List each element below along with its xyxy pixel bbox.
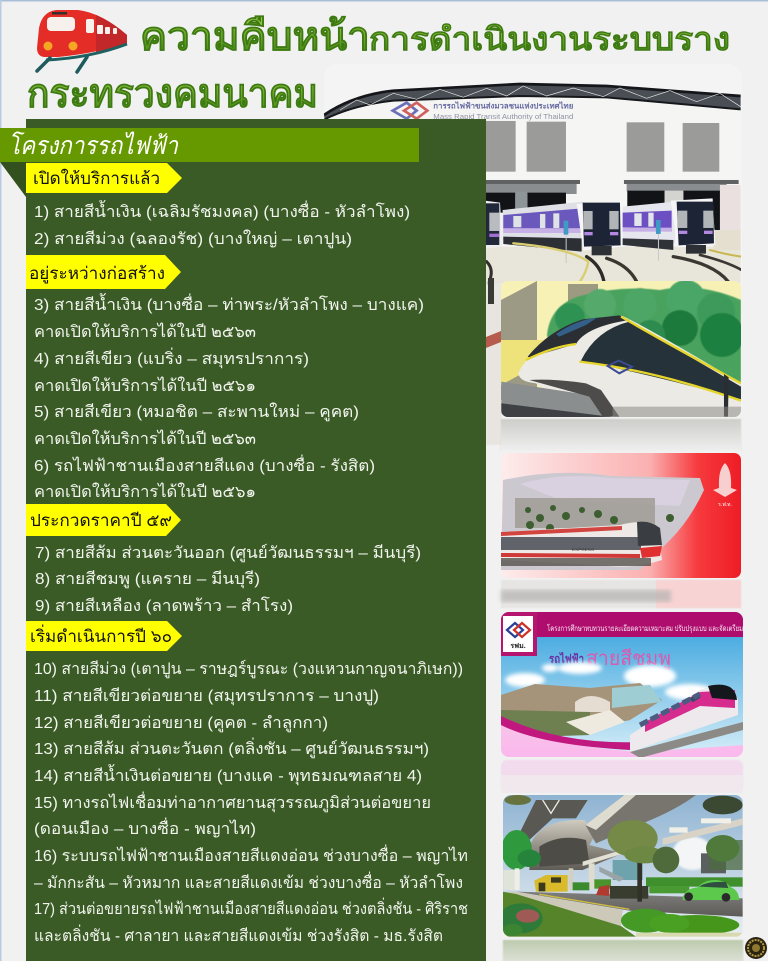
- train 2 body: [503, 202, 585, 247]
- list: under construction lines: 3) สายสีน้ำเงิน (บางซื่อ – ท่าพระ/หัวลำโพง – บางแค): [34, 293, 424, 314]
- train body: [518, 316, 741, 420]
- gravel: [636, 933, 743, 937]
- list: starting 2560 lines: 14) สายสีน้ำเงินต่อขยาย (บางแค - พุทธมณฑลสาย 4): [34, 764, 422, 786]
- list: bidding lines: [35, 543, 421, 615]
- dark and red cars: [610, 886, 648, 899]
- platform signs: [656, 220, 661, 234]
- MRTA sign text: [433, 101, 573, 121]
- list: starting 2560 lines: [34, 659, 468, 945]
- station photo: [501, 473, 704, 570]
- list: starting 2560 lines: 11) สายสีเขียวต่อขยาย (สมุทรปราการ – บางปู): [34, 687, 379, 706]
- MRTA sign text: การรถไฟฟ้าขนส่งมวลชนแห่งประเทศไทย: [433, 101, 573, 111]
- reflection: pink panel: [501, 760, 743, 793]
- skywalk: [663, 818, 743, 845]
- list: opened lines: 2) สายสีม่วง (ฉลองรัช) (บางใหญ่ – เตาปูน): [34, 229, 352, 249]
- depot wall: [325, 93, 741, 283]
- list: under construction lines: 4) สายสีเขียว (แบริ่ง – สมุทรปราการ): [34, 347, 309, 369]
- MRTA sign text: Mass Rapid Transit Authority of Thailand: [433, 114, 573, 121]
- MRTA logo box: [501, 612, 537, 656]
- list: under construction lines: 6) รถไฟฟ้าชานเมืองสายสีแดง (บางซื่อ - รังสิต): [34, 454, 375, 475]
- pink line wordmark: รถไฟฟ้า: [549, 651, 584, 666]
- train 3 body: [623, 202, 675, 243]
- track beam: [501, 382, 613, 420]
- louvres: [480, 121, 719, 172]
- pink line wordmark: [549, 648, 671, 671]
- image: red line SRT: [501, 453, 741, 578]
- title: line 1: ความคืบหน้า: [140, 15, 370, 59]
- top-right tree: [703, 796, 743, 814]
- list: under construction lines: คาดเปิดให้บริการได้ในปี ๒๕๖๑: [34, 376, 256, 395]
- mall building: [501, 683, 662, 722]
- reflection: road panel: [503, 940, 743, 961]
- awnings and recess band: [480, 184, 577, 194]
- distant building: [701, 853, 726, 873]
- list: starting 2560 lines: 17) ส่วนต่อขยายรถไฟฟ้าชานเมืองสายสีแดงอ่อน ช่วงตลิ่งชัน - ศิริราช: [34, 897, 468, 918]
- tag: opened: เปิดให้บริการแล้ว: [33, 168, 160, 188]
- image: station and road rendering: [499, 795, 743, 937]
- list: opened lines: [34, 200, 410, 249]
- list: starting 2560 lines: 15) ทางรถไฟเชื่อมท่าอากาศยานสุวรรณภูมิส่วนต่อขยาย: [34, 791, 431, 813]
- MRTA logo: [393, 103, 427, 119]
- SRT emblem: [713, 463, 737, 508]
- reflection: yellow train: [501, 419, 741, 453]
- list: starting 2560 lines: และตลิ่งชัน - ศาลายา และสายสีแดงเข้ม ช่วงรังสิต - มธ.รังสิต: [34, 924, 443, 945]
- list: under construction lines: 5) สายสีเขียว (หมอชิต – สะพานใหม่ – คูคต): [34, 402, 359, 422]
- tag: starting 2560: [26, 621, 182, 651]
- SRT emblem: ร.ฟ.ท.: [718, 502, 732, 508]
- train 1: [486, 200, 501, 248]
- icon: red train on rails: [37, 10, 127, 72]
- list: starting 2560 lines: 12) สายสีเขียวต่อขยาย (คูคต - ลำลูกกา): [34, 714, 328, 733]
- train 2 front: [577, 202, 623, 251]
- dark openings: [480, 191, 720, 231]
- pillars: [583, 850, 622, 866]
- list: starting 2560 lines: 10) สายสีม่วง (เตาปูน – ราษฎร์บูรณะ (วงแหวนกาญจนาภิเษก)): [34, 659, 463, 679]
- hedges behind road: [646, 877, 743, 887]
- depot roof truss: [324, 84, 741, 120]
- green car: [683, 880, 739, 902]
- grass: [503, 892, 636, 937]
- road: [516, 892, 743, 917]
- title: line 2: กระทรวงคมนาคม: [27, 72, 318, 116]
- EXPRESS lettering: EXPRESS: [572, 547, 594, 552]
- title: line 1: [140, 15, 730, 59]
- list: under construction lines: คาดเปิดให้บริการได้ในปี ๒๕๖๓: [34, 322, 256, 341]
- tag: bidding: ประกวดราคาปี ๕๙: [30, 511, 172, 530]
- list: bidding lines: 8) สายสีชมพู (แคราย – มีนบุรี): [35, 570, 260, 589]
- image: purple line train depot: [324, 84, 742, 283]
- list: bidding lines: 7) สายสีส้ม ส่วนตะวันออก (ศูนย์วัฒนธรรมฯ – มีนบุรี): [35, 543, 421, 563]
- clouds: [673, 837, 713, 870]
- pink monorail: [630, 687, 738, 752]
- fold of heading ribbon: [0, 162, 26, 197]
- list: opened lines: 1) สายสีน้ำเงิน (เฉลิมรัชมงคล) (บางซื่อ - หัวลำโพง): [34, 200, 410, 221]
- reflection: red panel: [501, 580, 741, 608]
- panel: backdrop card behind depot photo: [324, 64, 742, 294]
- MRTA logo box: รฟม.: [510, 642, 526, 650]
- yellow lower-left wash: [501, 340, 545, 385]
- list: starting 2560 lines: 13) สายสีส้ม ส่วนตะวันตก (ตลิ่งชัน – ศูนย์วัฒนธรรมฯ): [34, 737, 429, 759]
- image: yellow line monorail: [501, 280, 744, 420]
- tracks: [487, 243, 742, 283]
- ground: [480, 247, 741, 283]
- pink line wordmark: สายสีชมพู: [586, 648, 671, 671]
- pink swoosh: [501, 722, 743, 757]
- image: pink line project: [501, 612, 743, 758]
- center tree: [608, 820, 679, 902]
- heading ribbon: [0, 128, 419, 162]
- heading ribbon: โครงการรถไฟฟ้า: [8, 131, 179, 160]
- tag: starting 2560: เริ่มดำเนินการปี ๖๐: [30, 624, 172, 646]
- list: under construction lines: คาดเปิดให้บริการได้ในปี ๒๕๖๓: [34, 429, 256, 448]
- tag: under construction: [26, 255, 181, 289]
- photo spill left of yellow train: fading track: [486, 278, 502, 445]
- station roof: [519, 800, 588, 840]
- title: line 1: การดำเนินงานระบบราง: [369, 21, 730, 57]
- list: starting 2560 lines: (ดอนเมือง – บางซื่อ - พญาไท): [34, 817, 256, 838]
- list: bidding lines: 9) สายสีเหลือง (ลาดพร้าว – สำโรง): [35, 596, 293, 615]
- trees: [546, 281, 741, 382]
- left tree: [501, 795, 541, 890]
- station body: [529, 820, 623, 870]
- train 3 front: [671, 198, 715, 247]
- list: under construction lines: คาดเปิดให้บริการได้ในปี ๒๕๖๑: [34, 482, 256, 501]
- bus: [534, 875, 568, 892]
- seal: [745, 937, 767, 959]
- red express train: [501, 522, 662, 567]
- panel: project list: [26, 119, 486, 961]
- viaduct: [585, 795, 696, 843]
- foreground shrubs: [499, 903, 739, 936]
- clouds: [505, 662, 715, 700]
- tag: under construction: อยู่ระหว่างก่อสร้าง: [29, 264, 165, 284]
- list: under construction lines: [34, 293, 424, 501]
- list: starting 2560 lines: 16) ระบบรถไฟฟ้าชานเมืองสายสีแดงอ่อน ช่วงบางซื่อ – พญาไท: [34, 844, 468, 865]
- list: starting 2560 lines: – มักกะสัน – หัวหมาก และสายสีแดงเข้ม ช่วงบางซื่อ – หัวลำโพง: [34, 871, 463, 892]
- tag: opened: [26, 163, 182, 193]
- tag: bidding: [26, 504, 181, 536]
